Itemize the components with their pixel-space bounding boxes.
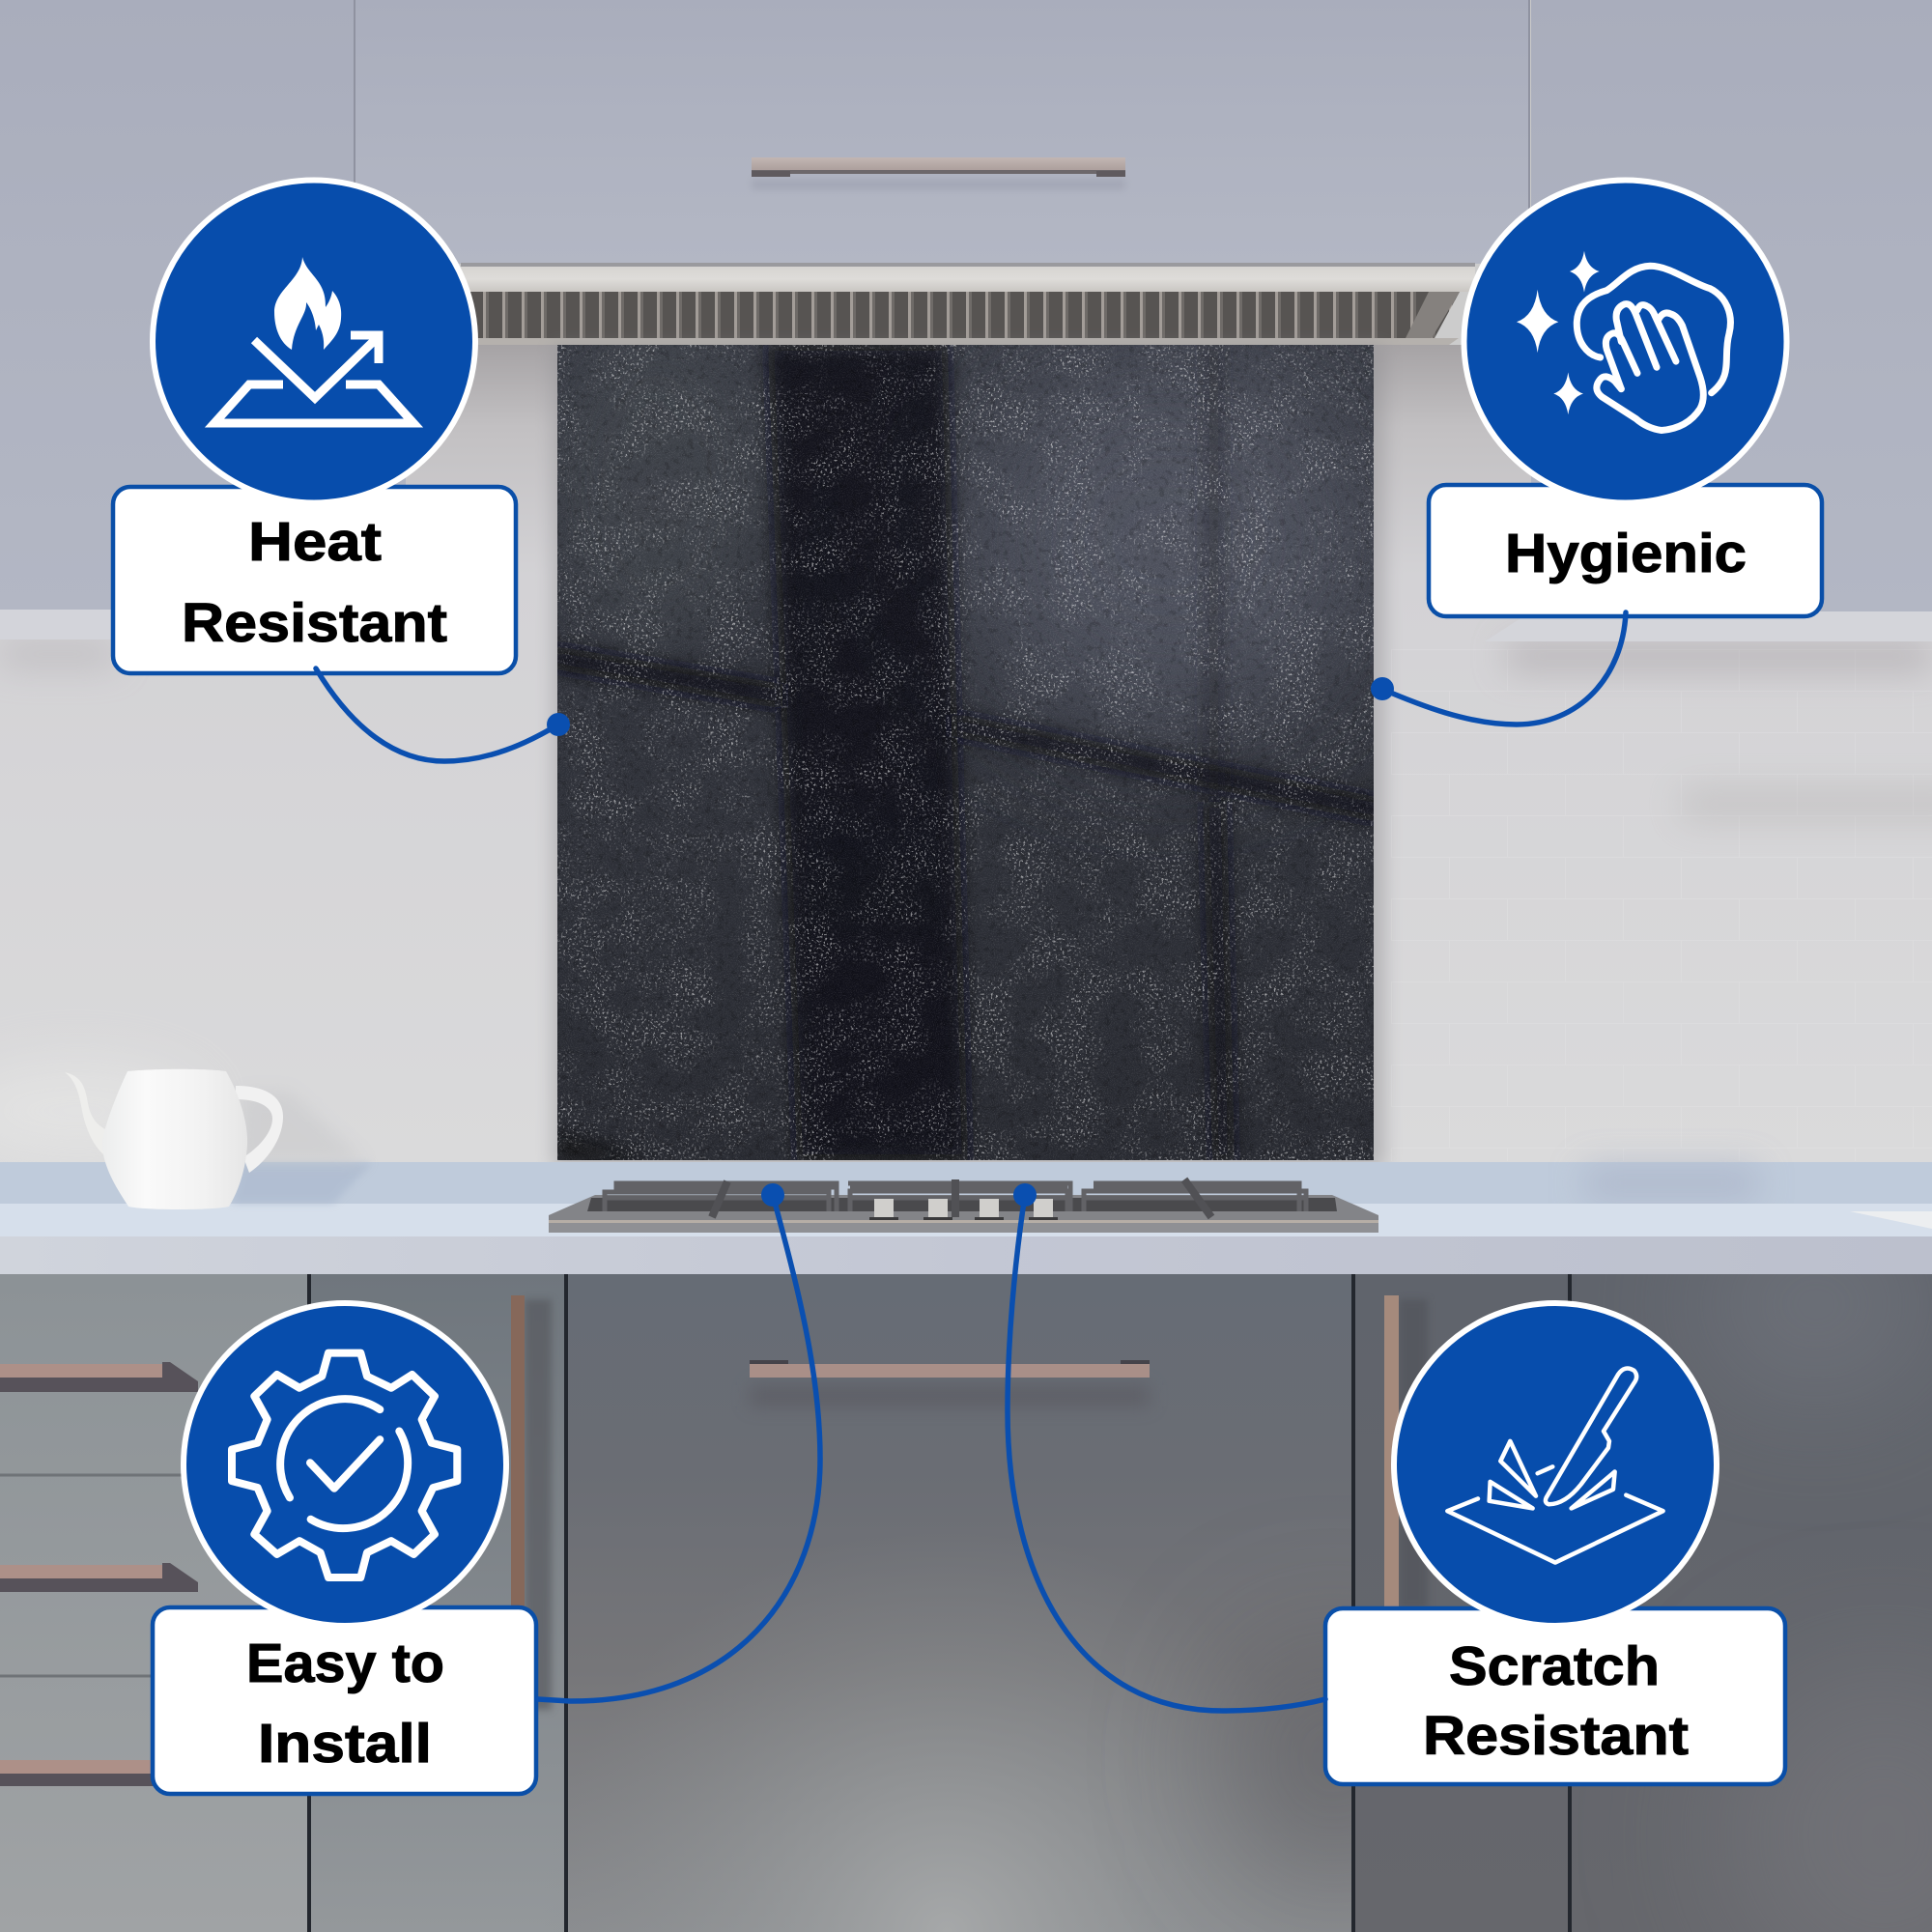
upper centre cabinet bbox=[355, 0, 1529, 264]
callout box: heat resistant bbox=[113, 487, 516, 673]
icon badge: scratch resistant bbox=[1394, 1303, 1717, 1626]
label: easy to install: Install bbox=[258, 1713, 432, 1775]
upper-left reflection bbox=[576, 377, 738, 623]
callout box: scratch resistant bbox=[1325, 1608, 1785, 1784]
icon: hand wiping with sparkles bbox=[1517, 251, 1730, 431]
label: heat resistant: Resistant bbox=[182, 592, 447, 654]
surface fine grain bbox=[557, 345, 1374, 1160]
panel shadow bbox=[553, 345, 1385, 1168]
upper right cabinet bbox=[1531, 0, 1932, 611]
left vertical handle bbox=[511, 1295, 552, 1710]
cabinet seams bbox=[355, 0, 1529, 264]
icon badge: hygienic bbox=[1464, 180, 1787, 502]
label: easy to install: Easy to bbox=[246, 1633, 444, 1694]
centre door handle bbox=[750, 1360, 1150, 1406]
thin vertical shadow lower bbox=[1203, 802, 1235, 1160]
horizontal shadow band left bbox=[551, 645, 782, 709]
connector: scratch resistant bbox=[1008, 1183, 1325, 1711]
worktop surface bbox=[0, 1204, 1932, 1236]
worktop upstand bbox=[0, 1162, 1932, 1204]
connector: heat resistant bbox=[316, 668, 570, 761]
lighter wall area behind teapot bbox=[0, 1063, 203, 1159]
thin vertical shadow upper bbox=[1203, 345, 1225, 802]
worktop corner piece bbox=[1850, 1211, 1932, 1229]
hob grates bbox=[605, 1183, 1306, 1211]
label: scratch resistant: Scratch bbox=[1449, 1635, 1660, 1697]
faint wall tile joints bbox=[1391, 649, 1932, 1161]
teapot bbox=[65, 1069, 372, 1209]
wall shadow under left cabinet bbox=[0, 641, 116, 667]
hob bbox=[549, 1179, 1378, 1233]
door seams bbox=[309, 1274, 1570, 1932]
wall shadow band right bbox=[1681, 787, 1932, 821]
icon: flame with reflected arrow bbox=[214, 257, 413, 423]
label: hygienic: Hygienic bbox=[1505, 523, 1747, 584]
label: heat resistant: Heat bbox=[248, 511, 382, 573]
upper right cabinet strip bbox=[1485, 611, 1932, 641]
icon badge: easy to install bbox=[184, 1303, 506, 1626]
icon: gear with check mark bbox=[232, 1353, 457, 1577]
upstand shadow right bbox=[1584, 1167, 1758, 1200]
worktop front bbox=[0, 1236, 1932, 1274]
connector: easy to install bbox=[538, 1183, 820, 1701]
drawer handles bbox=[0, 1362, 198, 1786]
right vertical handle bbox=[1384, 1295, 1428, 1614]
connector: hygienic bbox=[1371, 612, 1626, 724]
icon badge: heat resistant bbox=[153, 180, 475, 502]
icon: knife scratching surface bbox=[1447, 1369, 1663, 1563]
upper left cabinet strip bbox=[0, 610, 406, 639]
horizontal shadow band right bbox=[952, 713, 1381, 823]
wall bbox=[0, 345, 1932, 1166]
surface speckle texture bbox=[557, 345, 1374, 1160]
hob knobs bbox=[874, 1199, 1053, 1217]
lower cabinets bbox=[0, 1217, 1932, 1932]
surface dark mottling bbox=[557, 345, 1374, 1160]
extractor hood bbox=[461, 263, 1475, 345]
drawer seams bbox=[0, 1475, 193, 1676]
wall shadow under right cabinet bbox=[1507, 641, 1932, 670]
splashback panel bbox=[551, 319, 1381, 1160]
callout box: easy to install bbox=[153, 1607, 536, 1794]
upper handle bbox=[752, 157, 1125, 189]
callout box: hygienic bbox=[1429, 485, 1822, 616]
label: scratch resistant: Resistant bbox=[1423, 1705, 1689, 1767]
upper left cabinet bbox=[0, 0, 406, 610]
upper-right reflection bbox=[956, 348, 1381, 734]
bottom-left dark corner bbox=[557, 1135, 657, 1160]
main vertical shadow band bbox=[768, 345, 968, 1160]
